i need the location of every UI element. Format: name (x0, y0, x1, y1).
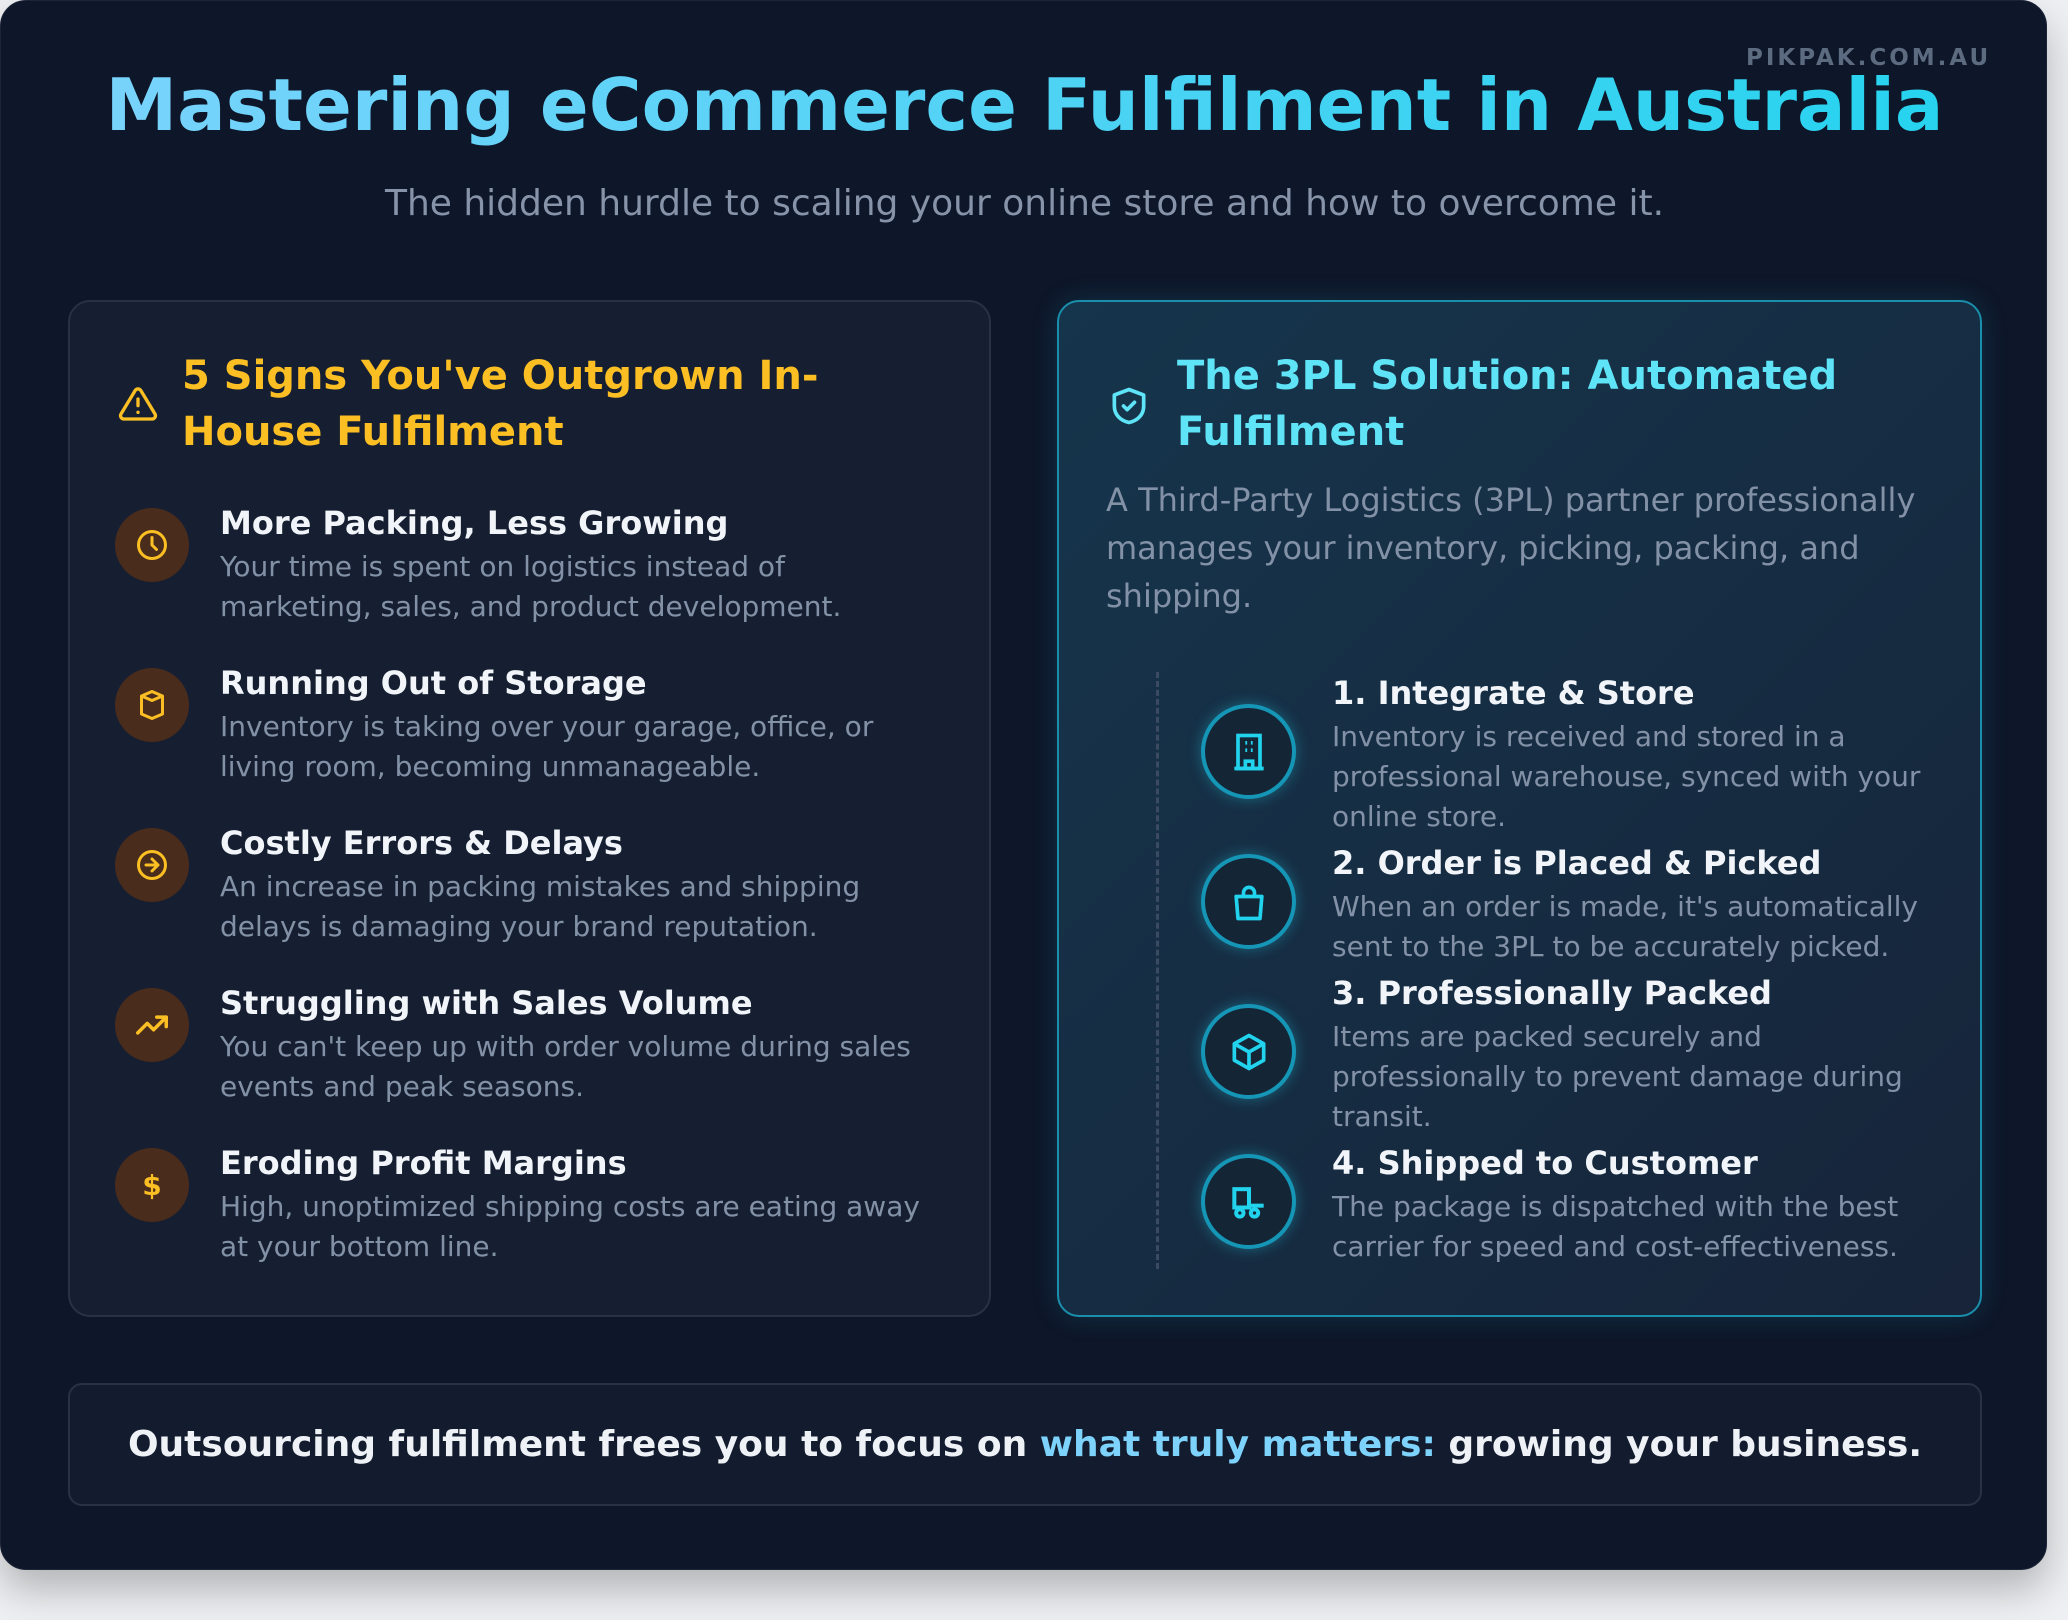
icon: cube (1201, 1004, 1296, 1099)
step 4: The package is dispatched with the best (1332, 1190, 1898, 1223)
icon: building (1201, 704, 1296, 799)
icon: trend (115, 988, 189, 1062)
item: storage: living room, becoming unmanageable. (220, 750, 760, 783)
item: margins: High, unoptimized shipping costs are eating away (220, 1190, 920, 1223)
step 4 (1194, 1144, 1898, 1263)
step 4: carrier for speed and cost-effectiveness. (1332, 1230, 1898, 1263)
text: intro: shipping. (1106, 577, 1252, 615)
icon: dollar (115, 1148, 189, 1222)
icon: bag (1201, 854, 1296, 949)
step 2: 2. Order is Placed & Picked (1332, 844, 1821, 882)
item: errors (115, 824, 860, 943)
panel: 3PL solution (1057, 300, 1982, 1317)
text: intro: A Third-Party Logistics (3PL) partner professionally (1106, 481, 1915, 519)
step 1 (1194, 674, 1920, 833)
item: packing: More Packing, Less Growing (220, 504, 728, 542)
item: storage: Running Out of Storage (220, 664, 647, 702)
item: margins: at your bottom line. (220, 1230, 498, 1263)
icon: warning (118, 387, 158, 421)
timeline line (1156, 672, 1159, 1269)
callout: bottom banner: Outsourcing fulfilment frees you to focus on what truly matters: growing your business. (128, 1424, 1922, 1465)
icon: truck (1201, 1154, 1296, 1249)
step 4: 4. Shipped to Customer (1332, 1144, 1758, 1182)
heading: signs (182, 353, 819, 455)
step 1: online store. (1332, 800, 1506, 833)
item: margins: Eroding Profit Margins (220, 1144, 627, 1182)
heading: solution: The 3PL Solution: Automated (1177, 353, 1837, 399)
heading: solution: Fulfilment (1177, 409, 1404, 455)
item: margins (115, 1144, 920, 1263)
title: Mastering eCommerce Fulfilment in Australia (106, 63, 1943, 147)
heading: signs: House Fulfilment (182, 409, 564, 455)
icon: shield (1112, 388, 1146, 424)
step 1: Inventory is received and stored in a (1332, 720, 1846, 753)
icon: box (115, 668, 189, 742)
panel: signs (68, 300, 991, 1317)
item: volume (115, 984, 911, 1103)
item: packing (115, 504, 841, 623)
subtitle: The hidden hurdle to scaling your online store and how to overcome it. (385, 183, 1664, 224)
text: intro: manages your inventory, picking, packing, and (1106, 529, 1860, 567)
step 3: professionally to prevent damage during (1332, 1060, 1903, 1093)
brand tag: PIKPAK.COM.AU (1746, 45, 1991, 71)
item: packing: marketing, sales, and product development. (220, 590, 841, 623)
item: storage (115, 664, 874, 783)
heading: solution (1177, 353, 1837, 455)
step 2: When an order is made, it's automatically (1332, 890, 1918, 923)
icon: arrow circle (115, 828, 189, 902)
icon: dollar: $ (142, 1168, 162, 1202)
step 1: professional warehouse, synced with your (1332, 760, 1920, 793)
step 3: 3. Professionally Packed (1332, 974, 1772, 1012)
item: volume: Struggling with Sales Volume (220, 984, 753, 1022)
item: packing: Your time is spent on logistics instead of (220, 550, 785, 583)
step 1: 1. Integrate & Store (1332, 674, 1695, 712)
step 2: sent to the 3PL to be accurately picked. (1332, 930, 1889, 963)
item: storage: Inventory is taking over your garage, office, or (220, 710, 873, 743)
item: volume: You can't keep up with order volume during sales (220, 1030, 911, 1063)
item: volume: events and peak seasons. (220, 1070, 584, 1103)
step 3: Items are packed securely and (1332, 1020, 1762, 1053)
heading: signs: 5 Signs You've Outgrown In- (182, 353, 819, 399)
item: errors: delays is damaging your brand reputation. (220, 910, 818, 943)
text: intro (1106, 481, 1915, 615)
step 3: transit. (1332, 1100, 1432, 1133)
step 2 (1194, 844, 1918, 963)
step 3 (1194, 974, 1903, 1133)
item: errors: Costly Errors & Delays (220, 824, 623, 862)
icon: clock (115, 508, 189, 582)
item: errors: An increase in packing mistakes and shipping (220, 870, 860, 903)
callout: bottom banner (68, 1383, 1982, 1506)
